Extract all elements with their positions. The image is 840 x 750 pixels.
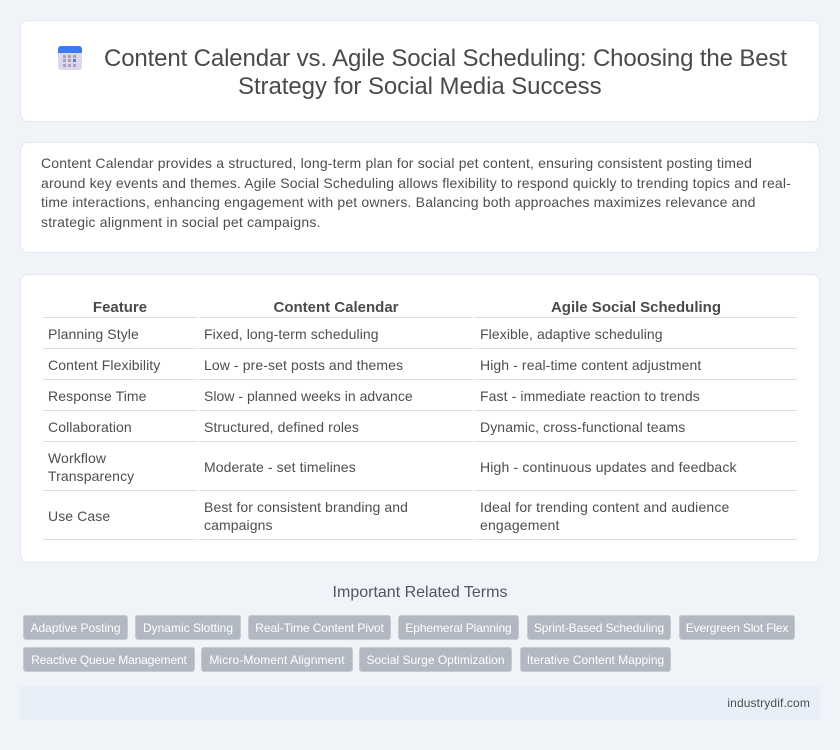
header panel xyxy=(20,20,820,122)
column headers: Content Calendar xyxy=(273,299,398,316)
row: collaboration: Structured, defined roles xyxy=(204,419,359,435)
row: response time: Slow - planned weeks in advance xyxy=(204,388,413,404)
row: response time xyxy=(48,388,700,404)
tag: Micro-Moment Alignment xyxy=(209,653,345,667)
related term tags xyxy=(23,615,795,672)
description text: strategic alignment in social pet campaigns. xyxy=(41,214,321,230)
column headers: Agile Social Scheduling xyxy=(551,299,721,316)
tag: Ephemeral Planning xyxy=(405,621,512,635)
row: content flexibility: Low - pre-set posts and themes xyxy=(204,357,403,373)
row: collaboration xyxy=(48,419,685,435)
row: use case: campaigns xyxy=(204,517,273,533)
tag: Social Surge Optimization xyxy=(366,653,505,667)
column headers: Feature xyxy=(93,299,147,316)
tag xyxy=(201,647,353,672)
row: use case: Ideal for trending content and audience xyxy=(480,499,729,515)
title xyxy=(104,45,787,100)
row: response time: Fast - immediate reaction to trends xyxy=(480,388,700,404)
row: workflow transparency: Workflow xyxy=(48,450,106,466)
row: collaboration: Collaboration xyxy=(48,419,132,435)
tag xyxy=(398,615,519,640)
row: planning style: Fixed, long-term scheduling xyxy=(204,326,379,342)
row: planning style: Flexible, adaptive scheduling xyxy=(480,326,663,342)
row: use case xyxy=(48,499,729,533)
tag xyxy=(527,615,671,640)
related terms heading: Important Related Terms xyxy=(333,584,507,601)
tag xyxy=(679,615,795,640)
tag xyxy=(23,647,195,672)
row: content flexibility: High - real-time content adjustment xyxy=(480,357,701,373)
tag: Dynamic Slotting xyxy=(143,621,233,635)
tag xyxy=(135,615,241,640)
footer source text: industrydif.com xyxy=(727,696,810,710)
row: response time: Response Time xyxy=(48,388,147,404)
row: collaboration: Dynamic, cross-functional teams xyxy=(480,419,685,435)
tag xyxy=(359,647,512,672)
row: content flexibility: Content Flexibility xyxy=(48,357,160,373)
footer bar xyxy=(20,686,820,720)
tag xyxy=(23,615,128,640)
row: use case: engagement xyxy=(480,517,560,533)
row: workflow transparency xyxy=(48,450,737,484)
icon: calendar xyxy=(58,46,82,70)
tag xyxy=(520,647,671,672)
row: planning style xyxy=(48,326,663,342)
row: use case: Use Case xyxy=(48,508,110,524)
tag: Iterative Content Mapping xyxy=(527,653,664,667)
row: use case: Best for consistent branding and xyxy=(204,499,408,515)
row: content flexibility xyxy=(48,357,702,373)
tag: Evergreen Slot Flex xyxy=(686,621,788,635)
description text xyxy=(41,155,791,230)
row: planning style: Planning Style xyxy=(48,326,139,342)
title: Content Calendar vs. Agile Social Scheduling: Choosing the Best xyxy=(104,45,787,72)
description panel xyxy=(20,142,820,253)
tag xyxy=(248,615,391,640)
description text: time interactions, enhancing engagement with pet owners. Balancing both approaches maximizes relevance and xyxy=(41,194,756,210)
title: Strategy for Social Media Success xyxy=(238,73,602,100)
row: workflow transparency: Transparency xyxy=(48,468,134,484)
row: workflow transparency: High - continuous updates and feedback xyxy=(480,459,737,475)
row: workflow transparency: Moderate - set timelines xyxy=(204,459,356,475)
description text: Content Calendar provides a structured, long-term plan for social pet content, ensuring consistent posting timed xyxy=(41,155,752,171)
tag: Reactive Queue Management xyxy=(31,653,187,667)
column headers xyxy=(93,299,721,316)
comparison table panel xyxy=(20,274,820,563)
tag: Adaptive Posting xyxy=(30,621,121,635)
description text: around key events and themes. Agile Social Scheduling allows flexibility to respond quickly to trending topics and real- xyxy=(41,174,791,190)
tag: Sprint-Based Scheduling xyxy=(534,621,664,635)
tag: Real-Time Content Pivot xyxy=(255,621,384,635)
table xyxy=(43,299,797,540)
